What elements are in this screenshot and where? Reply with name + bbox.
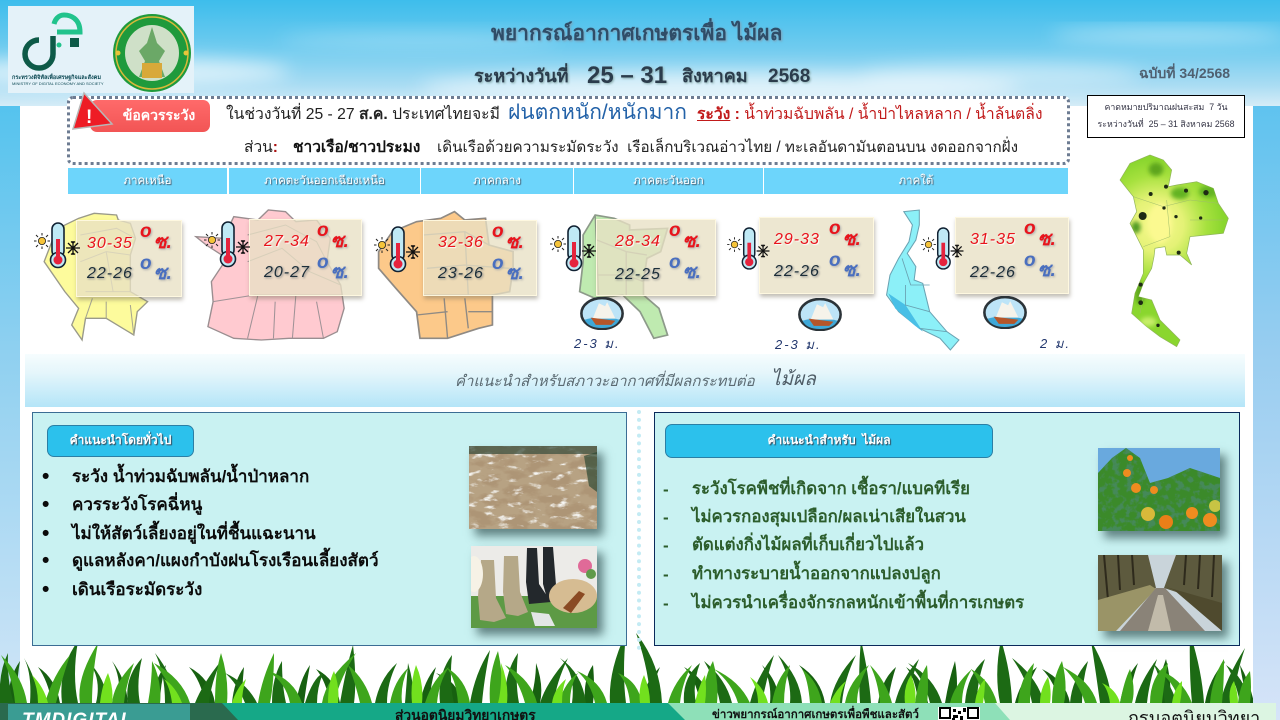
panel: warning box: [67, 96, 1070, 165]
max unit: oซ.: [140, 221, 172, 253]
max temperature: 31-35: [970, 231, 1016, 248]
subtitle year: 2568: [768, 66, 810, 87]
wave height south east coast: 2-3 ม.: [775, 337, 822, 352]
general advice list: •: [42, 493, 49, 516]
min temperature: 20-27: [264, 264, 310, 281]
map: south: [887, 210, 959, 350]
min temperature: 22-26: [970, 264, 1016, 281]
icon: ship east: [580, 297, 624, 330]
region south: [764, 168, 1068, 194]
crop advice list: -: [663, 594, 669, 613]
crop advice list: ระวังโรคพืชที่เกิดจาก เชื้อรา/แบคทีเรีย: [692, 479, 970, 498]
icon: weather central: [374, 226, 420, 272]
panel: general advice: [32, 412, 627, 646]
region south: ภาคใต้: [899, 175, 933, 187]
crop advice list: -: [663, 565, 669, 584]
min temperature: 23-26: [438, 265, 484, 282]
warning heavy rain text: ฝนตกหนัก/หนักมาก: [508, 101, 687, 124]
advice banner: [25, 354, 1245, 407]
crop advice list: -: [663, 508, 669, 527]
wave height south west coast: 2 ม.: [1040, 336, 1071, 351]
photo: drainage canal: [1098, 555, 1222, 631]
crop advice list: ทำทางระบายน้ำออกจากแปลงปลูก: [692, 564, 941, 583]
icon: weather south east coast: [727, 227, 770, 270]
min temperature: 22-26: [87, 265, 133, 282]
max temperature: 27-34: [264, 233, 310, 250]
subtitle dates: 25 – 31: [587, 62, 667, 89]
crop advice list: ตัดแต่งกิ่งไม้ผลที่เก็บเกี่ยวไปแล้ว: [692, 535, 924, 554]
rain legend box: ระหว่างวันที่ 25 – 31 สิงหาคม 2568: [1098, 119, 1234, 129]
warning caution text: ระวัง : น้ำท่วมฉับพลัน / น้ำป่าไหลหลาก / น้ำล้นตลิ่ง: [697, 106, 1043, 123]
temperature box: south east coast: [759, 217, 874, 294]
map: central: [379, 212, 513, 338]
temperature box: central: [423, 220, 537, 296]
advice banner text: คำแนะนำสำหรับสภาวะอากาศที่มีผลกระทบต่อ: [455, 373, 755, 390]
general advice list: เดินเรือระมัดระวัง: [72, 580, 202, 599]
warning line 2: ส่วน:: [244, 139, 278, 156]
map: north: [43, 209, 514, 342]
issue number: ฉบับที่ 34/2568: [1139, 65, 1230, 81]
temperature box: east: [596, 219, 716, 296]
title: พยากรณ์อากาศเกษตรเพื่อ ไม้ผล: [491, 22, 782, 45]
region north: ภาคเหนือ: [123, 175, 172, 187]
min unit: oซ.: [669, 252, 701, 283]
crop advice heading: [665, 424, 993, 458]
region north: [68, 168, 227, 194]
general advice list: ดูแลหลังคา/แผงกำบังฝนโรงเรือนเลี้ยงสัตว์: [72, 551, 378, 570]
sky header background: [0, 0, 1280, 106]
dotted divider: [637, 410, 641, 650]
panel: crop advice: [654, 412, 1240, 646]
icon: warning triangle: !: [86, 107, 92, 128]
general advice list: ระวัง น้ำท่วมฉับพลัน/น้ำป่าหลาก: [72, 467, 309, 486]
icon: ship south west coast: [983, 296, 1027, 329]
icon: weather north: [34, 222, 80, 268]
crop advice list: -: [663, 480, 669, 499]
grass strip: [0, 633, 1253, 703]
general advice list: ไม่ให้สัตว์เลี้ยงอยู่ในที่ชื้นแฉะนาน: [72, 524, 316, 543]
rain legend box: คาดหมายปริมาณฝนสะสม 7 วัน: [1104, 102, 1228, 112]
temperature box: north: [76, 220, 182, 297]
wave height east: 2-3 ม.: [574, 336, 621, 351]
general advice list: •: [42, 549, 49, 572]
subtitle: date range: [474, 62, 812, 89]
min unit: oซ.: [829, 250, 861, 281]
max unit: oซ.: [317, 220, 349, 252]
temperature box: northeast: [249, 219, 362, 296]
region east: [574, 168, 763, 194]
fishermen advice: เดินเรือด้วยความระมัดระวัง เรือเล็กบริเวณอ่าวไทย / ทะเลอันดามันตอนบน งดออกจากฝั่ง: [437, 139, 1018, 156]
max unit: oซ.: [492, 221, 524, 253]
region east: ภาคตะวันออก: [633, 175, 704, 187]
icon: weather northeast: [204, 221, 250, 268]
region central: ภาคกลาง: [473, 175, 521, 187]
warning line 1: ในช่วงวันที่ 25 - 27 ส.ค. ประเทศไทยจะมี: [226, 106, 500, 123]
advice banner crop name: ไม้ผล: [771, 369, 816, 390]
icon: digital economy logo: [12, 12, 104, 86]
min unit: oซ.: [1024, 250, 1056, 281]
icon: digital economy logo: กระทรวงดิจิทัลเพื่อเศรษฐกิจและสังคม: [12, 73, 101, 81]
min unit: oซ.: [140, 253, 172, 284]
side band left: [0, 106, 20, 720]
logos panel: [8, 6, 194, 93]
warning badge: ข้อควรระวัง: [123, 107, 195, 123]
photo: orange tree: [1098, 448, 1220, 531]
map: east: [578, 210, 960, 351]
fishermen heading: ชาวเรือ/ชาวประมง: [293, 139, 420, 156]
region northeast: [229, 168, 420, 194]
general advice list: [42, 464, 378, 601]
icon: ship south east coast: [798, 298, 842, 331]
max unit: oซ.: [829, 218, 861, 250]
icon: meteorological department seal: [113, 14, 191, 92]
region central: [421, 168, 573, 194]
footer bar: [0, 703, 1276, 720]
crop advice list: [663, 476, 1024, 613]
region header row: [68, 168, 1068, 194]
crop advice list: -: [663, 536, 669, 555]
min unit: oซ.: [492, 253, 524, 284]
icon: digital economy logo: MINISTRY OF DIGITAL ECONOMY AND SOCIETY: [12, 81, 104, 86]
max temperature: 29-33: [774, 231, 820, 248]
map: northeast: [196, 210, 344, 340]
icon: weather east: [550, 225, 596, 272]
temperature box: south west coast: [955, 217, 1069, 294]
subtitle label: ระหว่างวันที่: [474, 66, 568, 86]
min temperature: 22-25: [615, 266, 661, 283]
crop advice list: ไม่ควรกองสุมเปลือก/ผลเน่าเสียในสวน: [692, 507, 966, 526]
general advice list: •: [42, 578, 49, 601]
footer shapes: [0, 703, 1010, 720]
rain legend box: [1087, 95, 1245, 138]
region northeast: ภาคตะวันออกเฉียงเหนือ: [264, 175, 385, 187]
subtitle month: สิงหาคม: [682, 66, 748, 86]
max unit: oซ.: [669, 220, 701, 252]
warning badge: [90, 100, 210, 132]
min unit: oซ.: [317, 252, 349, 283]
icon: warning triangle: [72, 92, 114, 130]
crop advice heading: คำแนะนำสำหรับ ไม้ผล: [767, 433, 891, 447]
side band right: [1253, 106, 1280, 720]
general advice heading: คำแนะนำโดยทั่วไป: [70, 433, 171, 447]
general advice heading: [47, 425, 194, 457]
icon: QR code: [938, 707, 980, 720]
max temperature: 32-36: [438, 234, 484, 251]
max unit: oซ.: [1024, 218, 1056, 250]
max temperature: 30-35: [87, 235, 133, 252]
map: Thailand rainfall: [1120, 154, 1229, 348]
photo: flood water: [469, 446, 597, 529]
icon: weather south west coast: [921, 227, 964, 270]
general advice list: •: [42, 522, 49, 545]
max temperature: 28-34: [615, 233, 661, 250]
general advice list: •: [42, 465, 49, 488]
min temperature: 22-26: [774, 263, 820, 280]
general advice list: ควรระวังโรคฉี่หนู: [72, 495, 202, 514]
crop advice list: ไม่ควรนำเครื่องจักรกลหนักเข้าพื้นที่การเกษตร: [692, 593, 1024, 612]
photo: boots and tools: [471, 546, 597, 628]
